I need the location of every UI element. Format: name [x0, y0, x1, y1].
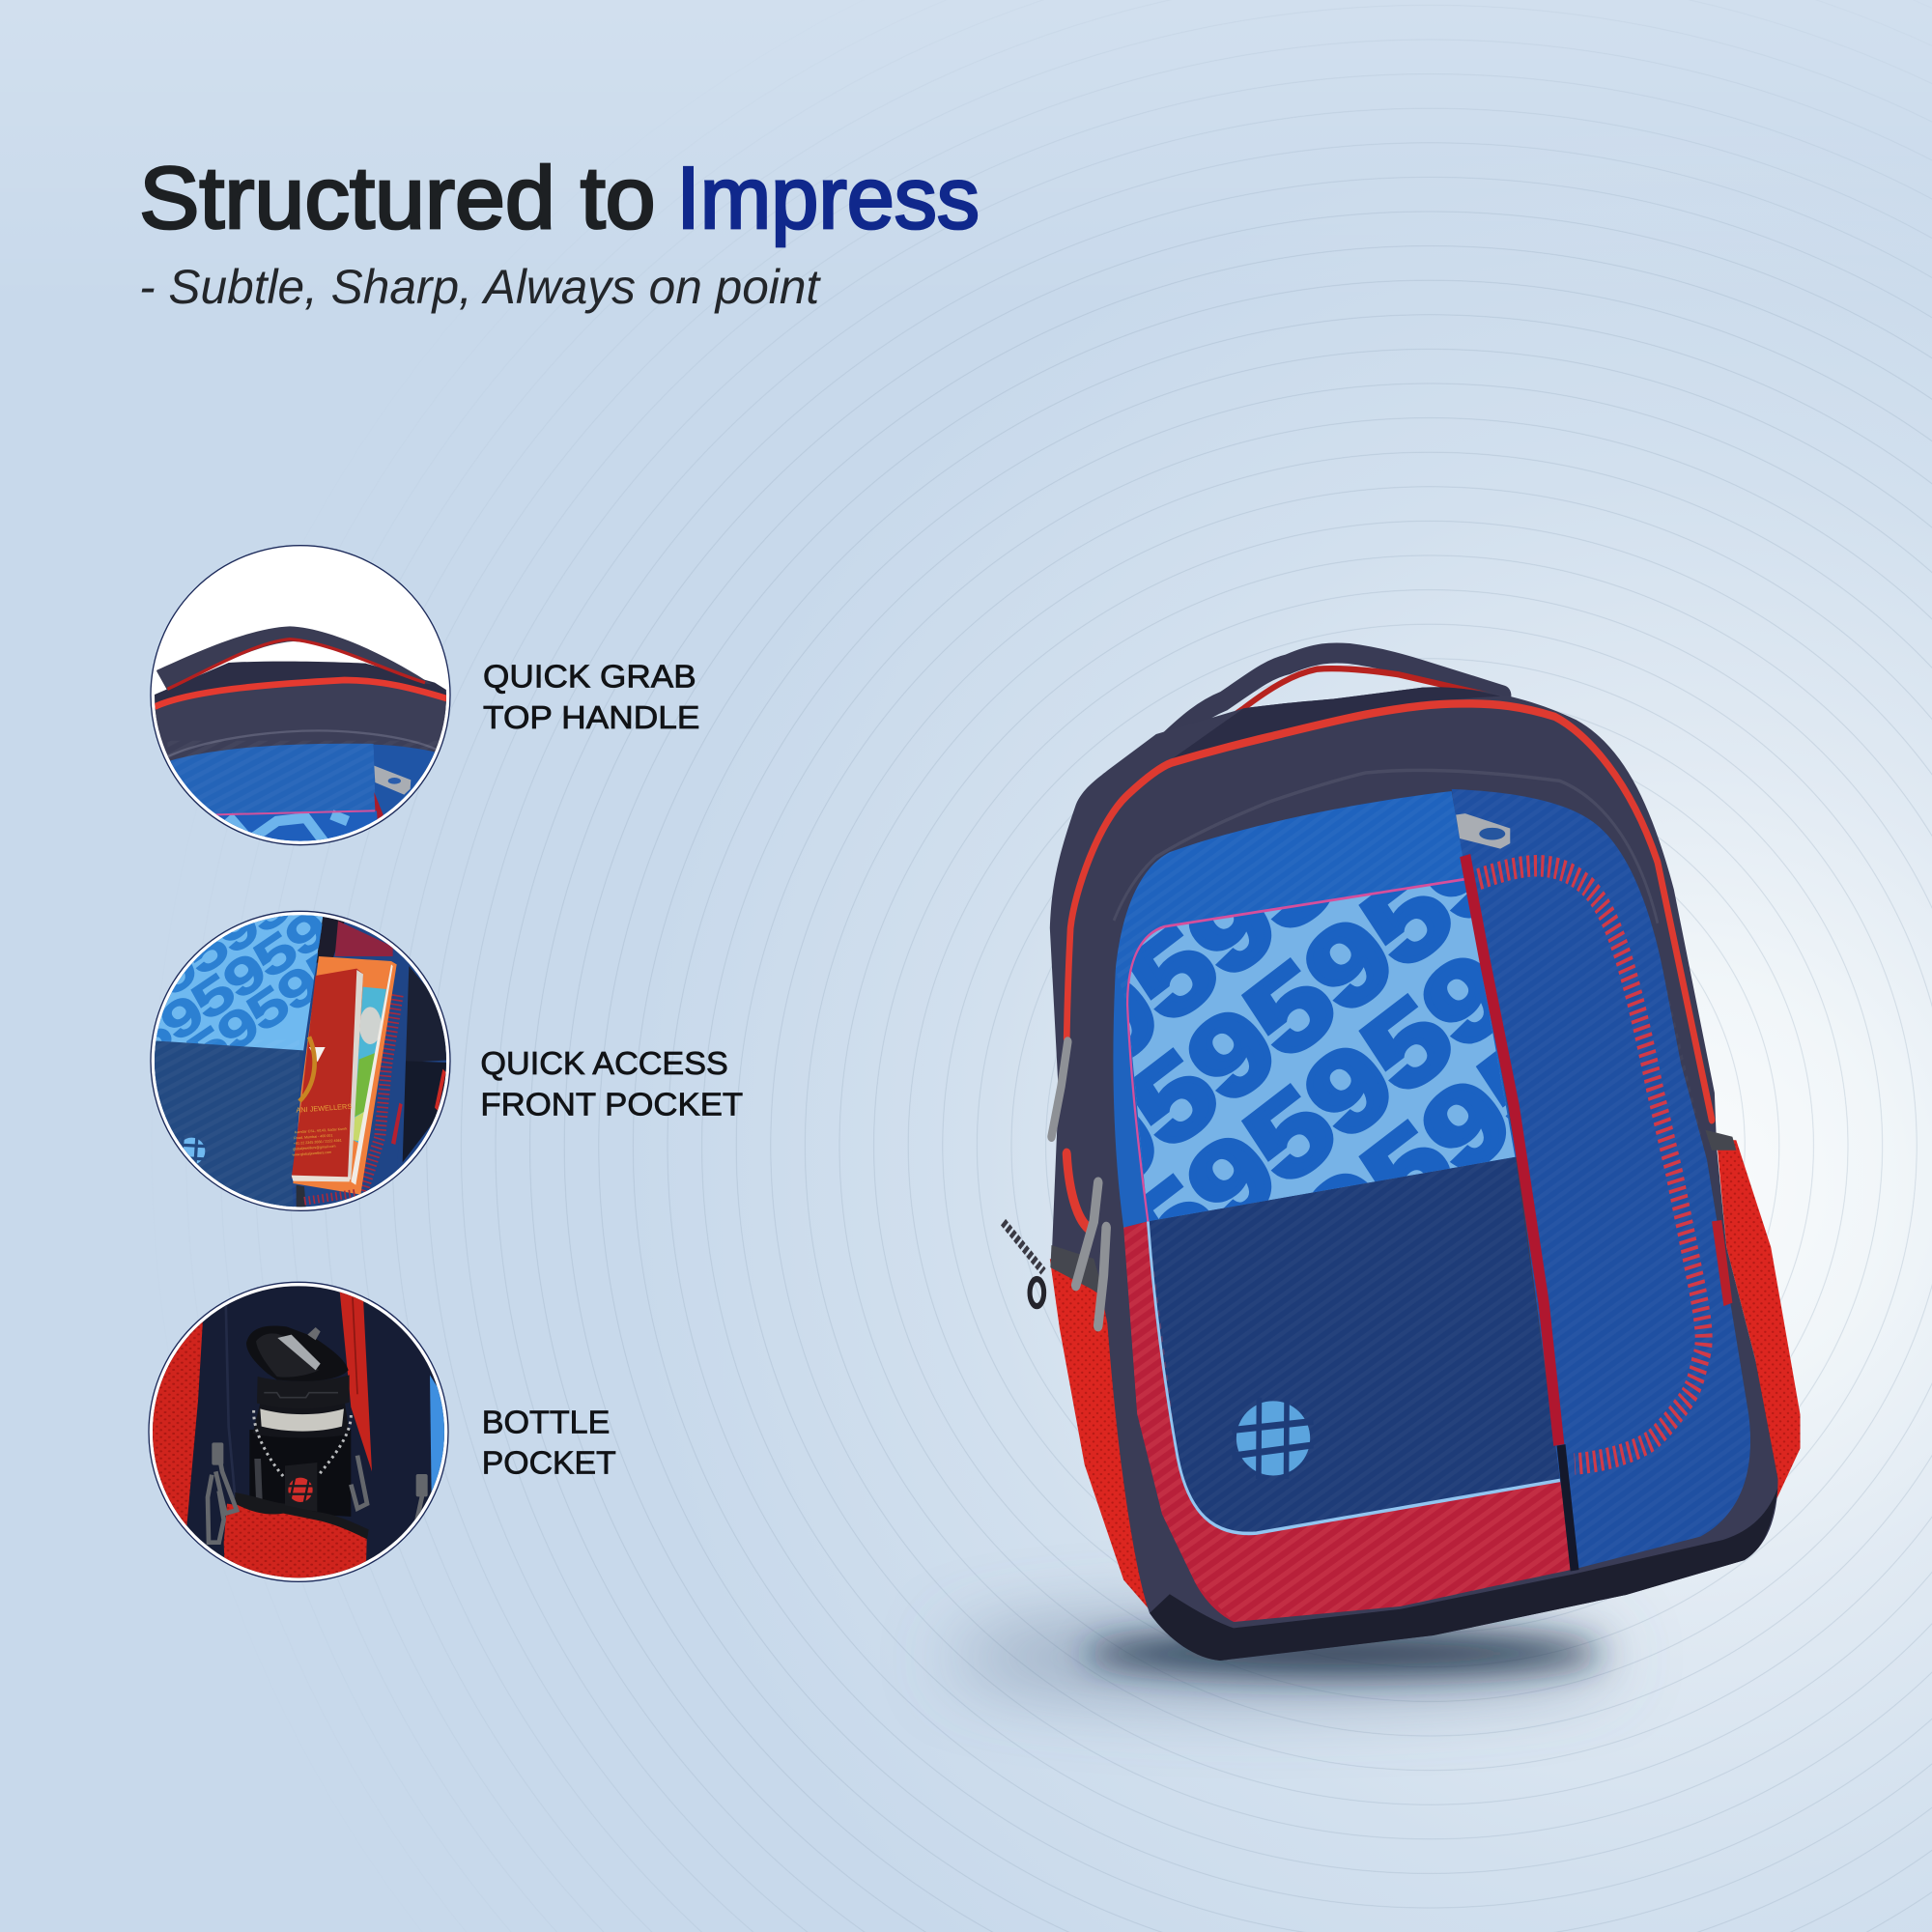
59 print: 5959595959 — [989, 713, 1651, 1262]
red bottom panel — [1123, 1221, 1575, 1622]
59 print: 5959595959 — [989, 336, 1651, 884]
front panel: left blue — [1113, 791, 1517, 1228]
title: Impress — [676, 150, 980, 247]
backpack shadow — [949, 1620, 1614, 1694]
feature: front pocket circle: 59595 — [179, 935, 358, 1081]
feature: front pocket circle — [150, 910, 451, 1211]
centre zipper — [1465, 856, 1575, 1571]
feature: bottle pocket circle — [145, 1278, 454, 1587]
feature: front pocket circle: globaljewellers@gmail.com — [293, 1145, 336, 1151]
label: bottle pocket: POCKET — [482, 1446, 616, 1482]
title — [139, 150, 980, 247]
pattern area — [1127, 879, 1515, 1221]
59 print: 5959595959 — [989, 587, 1651, 1135]
brand logo — [1232, 1398, 1314, 1479]
top handle — [1160, 653, 1504, 760]
feature: front pocket circle: 595959 — [114, 856, 331, 1026]
feature: front pocket circle: Kamdar CSL, 4/143, Sadar Kunrk — [295, 1127, 348, 1134]
dashed track print — [1479, 866, 1704, 1464]
feature: front pocket circle: 595959 — [121, 900, 338, 1071]
feature: front pocket circle: ANI JEWELLERS — [296, 1102, 353, 1115]
label: quick access front pocket — [480, 1046, 743, 1122]
59 print — [1128, 881, 1508, 1221]
59 print: 5959595959 — [989, 964, 1651, 1513]
59 print: 5959595959 — [989, 462, 1651, 1009]
fabric texture — [1116, 789, 1750, 1622]
subtitle: - Subtle, Sharp, Always on point — [139, 260, 821, 314]
title: Structured to — [139, 150, 656, 247]
label: quick grab top handle: QUICK GRAB — [483, 660, 696, 696]
59 print: 5959595959 — [989, 838, 1651, 1387]
front panel: right blue — [1452, 789, 1750, 1569]
red piping — [1066, 703, 1712, 1228]
label: bottle pocket: BOTTLE — [482, 1405, 610, 1440]
backpack — [1001, 643, 1801, 1661]
zipper tail — [1004, 1222, 1044, 1306]
side mesh pockets — [1050, 1140, 1801, 1613]
label: quick access front pocket: QUICK ACCESS — [480, 1046, 728, 1082]
feature: top handle circle — [145, 546, 461, 853]
mesh collars — [1050, 1130, 1736, 1296]
side tag — [1712, 1220, 1732, 1306]
zipper pulls — [1051, 813, 1510, 1325]
feature: front pocket circle: Road, Mumbai - 400 001 — [294, 1134, 333, 1140]
label: quick grab top handle: TOP HANDLE — [483, 700, 699, 736]
seam above front panel — [1114, 770, 1658, 923]
navy front pocket — [1148, 1157, 1560, 1533]
label: quick access front pocket: FRONT POCKET — [480, 1087, 743, 1122]
top shade above piping — [1170, 687, 1500, 764]
59 print: 5959595959 — [989, 1090, 1651, 1638]
bottom black trim — [1150, 1488, 1778, 1661]
feature: front pocket circle: www.globaljewellers.com — [292, 1151, 331, 1157]
pocket piping — [1127, 879, 1560, 1533]
label: bottle pocket — [482, 1405, 616, 1482]
bag body — [1050, 687, 1778, 1661]
feature: front pocket circle: +91 22 2345 2666 / 2222 4561 — [294, 1139, 342, 1146]
label: quick grab top handle — [483, 660, 699, 736]
